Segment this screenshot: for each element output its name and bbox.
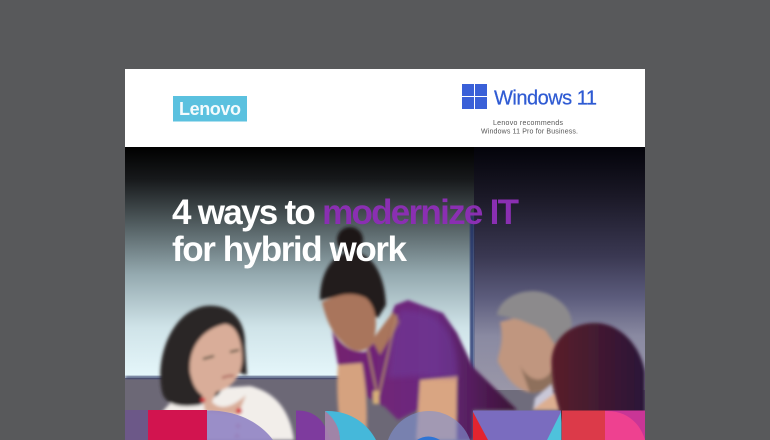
room background bbox=[125, 147, 645, 440]
icon: Windows logo bbox=[462, 84, 487, 109]
purple overlay on sleeve bbox=[388, 310, 458, 378]
photo: hybrid work meeting bbox=[125, 147, 645, 440]
title bbox=[172, 193, 519, 269]
cyan arc bbox=[325, 411, 376, 440]
blue semicircle bbox=[417, 436, 440, 440]
purple quarter circle bbox=[296, 410, 330, 440]
woman in the centre bbox=[320, 227, 517, 440]
Windows 11 wordmark: Windows 11 bbox=[494, 88, 597, 110]
triangle tile bbox=[473, 410, 561, 440]
infographic cover bbox=[125, 69, 645, 440]
title: for hybrid work bbox=[172, 230, 408, 269]
man on the right bbox=[497, 291, 572, 410]
muted purple block bbox=[125, 410, 148, 440]
recommendation note: Windows 11 Pro for Business. bbox=[481, 128, 578, 136]
title: 4 ways to modernize IT bbox=[172, 193, 519, 232]
red tile bbox=[562, 410, 607, 440]
woman with red hair, back to camera bbox=[552, 323, 645, 420]
geometric colour strip bbox=[125, 410, 645, 440]
crimson block bbox=[148, 410, 207, 440]
translucent blue circle bbox=[388, 411, 470, 440]
lavender quarter circle bbox=[207, 410, 273, 440]
pink tile bbox=[605, 410, 645, 440]
recommendation note: Lenovo recommends bbox=[493, 120, 564, 127]
Lenovo logo: Lenovo bbox=[179, 99, 241, 119]
Lenovo logo bbox=[173, 96, 247, 122]
woman on the left bbox=[153, 306, 294, 440]
recommendation note bbox=[481, 120, 578, 136]
header panel bbox=[125, 69, 645, 147]
